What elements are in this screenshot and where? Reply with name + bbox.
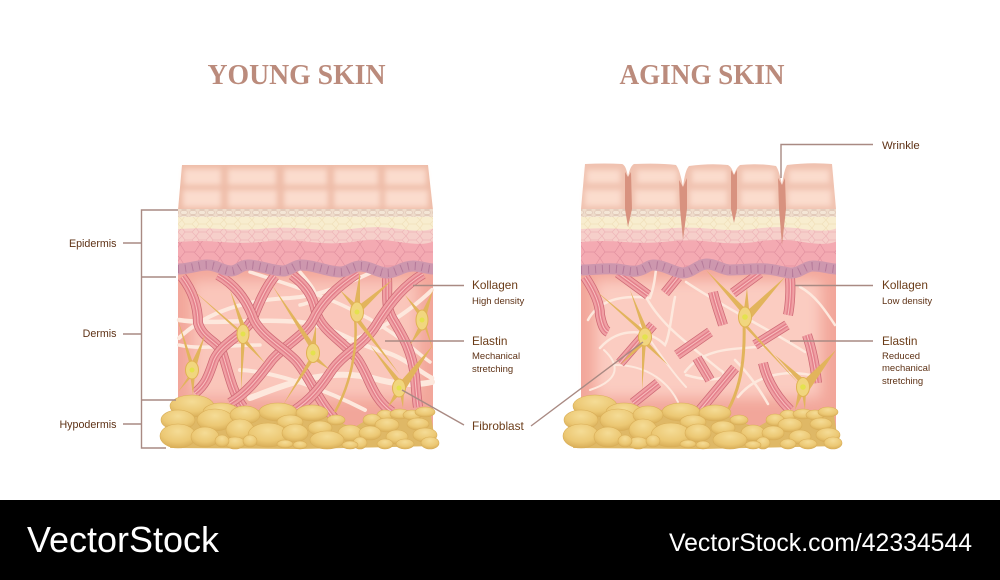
label: kollagen low density [882,278,932,307]
label: hypodermis: Hypodermis [59,419,116,431]
label: fibroblast: Fibroblast [472,419,525,433]
label: elastin mechanical stretching [472,334,520,375]
aging epidermis layers [581,209,836,273]
aging dermis background [581,262,836,430]
aging collagen fragments [585,273,817,410]
label: kollagen high density [472,278,525,307]
label: elastin reduced mechanical stretching: stretching [882,376,923,387]
label: wrinkle: Wrinkle [882,140,920,152]
young epidermis layers [178,209,433,274]
young stratum corneum top block [178,165,433,210]
panel: young skin cross-section [160,165,439,449]
young elastin fibers [179,272,432,412]
label: epidermis: Epidermis [69,238,116,250]
label: elastin mechanical stretching: stretching [472,364,513,375]
aging hypodermis fat [563,395,842,449]
label: kollagen low density: Low density [882,296,932,307]
title: aging skin: AGING SKIN [620,59,785,91]
aging fibroblast cells [595,270,836,410]
label: kollagen low density: Kollagen [882,278,928,292]
layer bracket [123,210,178,448]
label: elastin reduced mechanical stretching: Elastin [882,334,917,348]
young dermis background [178,262,433,430]
young hypodermis fat [160,395,439,449]
label: kollagen high density: High density [472,296,525,307]
label: elastin mechanical stretching: Elastin [472,334,507,348]
label: elastin mechanical stretching: Mechanical [472,351,520,362]
title: young skin: YOUNG SKIN [208,59,386,91]
label: elastin reduced mechanical stretching: Reduced [882,351,920,362]
young fibroblast cells [178,272,433,412]
callout lines: aging skin [531,144,873,426]
footer image id: VectorStock.com/42334544 [669,529,972,557]
footer bar [0,500,1000,580]
wrinkle grooves [625,170,786,245]
young collagen fibers [182,273,423,418]
callout lines: young skin [385,286,464,425]
aging elastin fibers [588,270,835,404]
label: dermis: Dermis [83,328,116,340]
aging stratum corneum top block with wrinkles [581,163,836,209]
panel: aging skin cross-section [563,163,842,449]
label: elastin reduced mechanical stretching [882,334,930,387]
footer logo text: VectorStock [27,519,220,560]
label: kollagen high density: Kollagen [472,278,518,292]
label: elastin reduced mechanical stretching: mechanical [882,363,930,374]
